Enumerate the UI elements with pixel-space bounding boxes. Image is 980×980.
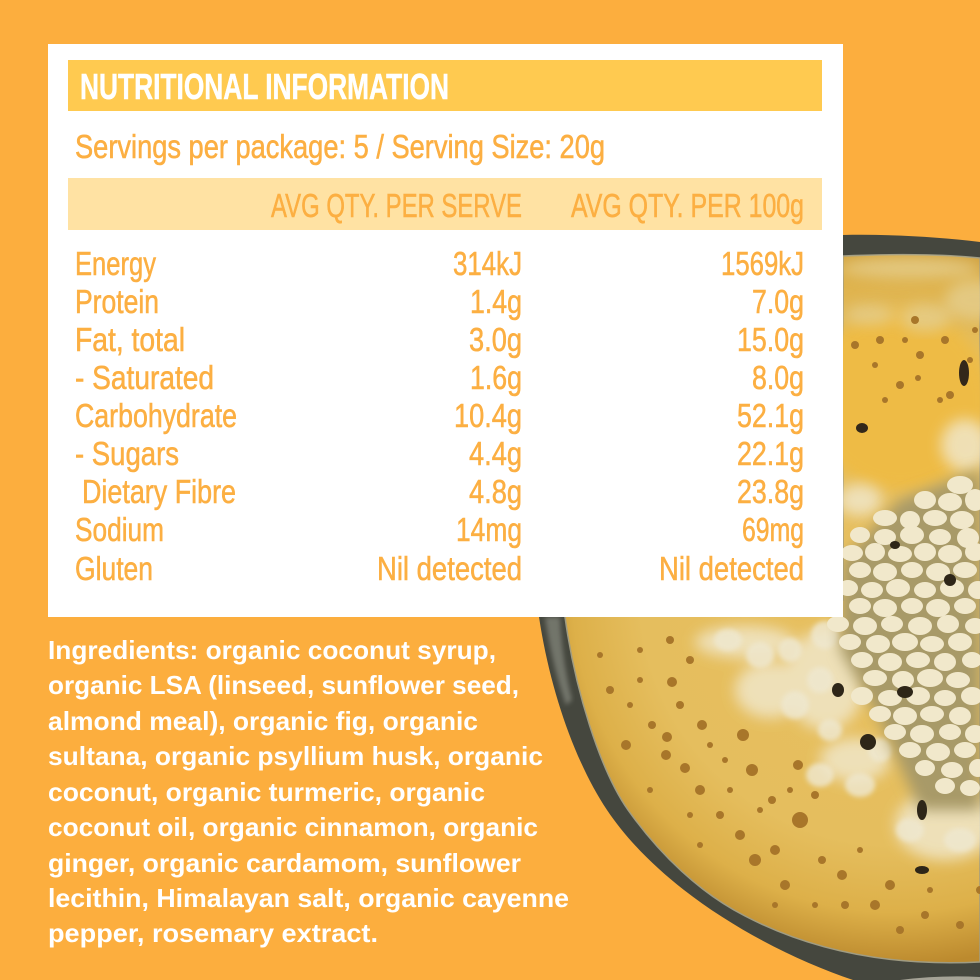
nutrient rows: 8.0g (752, 359, 804, 396)
nutrient rows: Carbohydrate (75, 397, 237, 434)
nutrient rows: 314kJ (453, 245, 522, 282)
nutrient rows: Sodium (75, 511, 164, 548)
nutrient rows: - Sugars (75, 435, 179, 472)
nutrient rows: 52.1g (737, 397, 804, 434)
ingredients text block: lecithin, Himalayan salt, organic cayenne (48, 883, 569, 913)
bubbles (597, 316, 980, 934)
nutrient rows: Fat, total (75, 321, 185, 358)
dark husks top (959, 360, 969, 386)
white card (48, 44, 843, 617)
ingredients text block: organic LSA (linseed, sunflower seed, (48, 670, 519, 700)
nutrient rows: 3.0g (469, 321, 522, 358)
nutrient rows: 15.0g (737, 321, 804, 358)
seed pile base (840, 470, 980, 810)
nutrient rows: 22.1g (737, 435, 804, 472)
rim highlight, left (545, 617, 572, 705)
column header bar: AVG QTY. PER 100g (571, 187, 804, 224)
nutrient rows: 1.4g (470, 283, 522, 320)
nutrient rows: 1569kJ (721, 245, 804, 282)
nutrient rows: Energy (75, 245, 156, 282)
dark husks among seeds (832, 541, 956, 874)
nutrient rows: 23.8g (737, 473, 804, 510)
nutrient rows: Nil detected (659, 550, 804, 587)
nutrient rows: Nil detected (377, 550, 522, 587)
hemp seeds (827, 476, 980, 796)
ingredients text block: sultana, organic psyllium husk, organic (48, 741, 543, 771)
pale top froth (840, 258, 980, 332)
nutrient rows: 10.4g (454, 397, 522, 434)
nutrient rows: 7.0g (752, 283, 804, 320)
photo: golden latte bowl with hemp seeds (539, 235, 980, 980)
nutrient rows: 14mg (456, 511, 522, 548)
column header bar: AVG QTY. PER SERVE (271, 187, 522, 224)
yellow upper latte (843, 312, 980, 494)
ingredients text block: almond meal), organic fig, organic (48, 706, 478, 736)
rim highlight, bottom (900, 976, 980, 980)
nutrient rows: 69mg (742, 511, 804, 548)
blurred out-of-focus seeds (714, 621, 976, 852)
ingredients text block: Ingredients: organic coconut syrup, (48, 635, 496, 665)
panel: nutrition table (48, 44, 843, 617)
ingredients text block: coconut oil, organic cinnamon, organic (48, 812, 538, 842)
nutrient rows: Protein (75, 283, 159, 320)
nutrient rows: Dietary Fibre (82, 473, 236, 510)
nutrient rows: 1.6g (470, 359, 522, 396)
ingredients text block: pepper, rosemary extract. (48, 918, 378, 948)
pale foam patches (695, 419, 980, 860)
foam bubbles and hemp seeds (597, 258, 980, 934)
serving info: Servings per package: 5 / Serving Size: 20g (75, 128, 605, 165)
nutrient rows: 4.4g (469, 435, 522, 472)
nutrient rows: 4.8g (469, 473, 522, 510)
nutrient rows: Gluten (75, 550, 153, 587)
column header bar (68, 178, 822, 230)
latte surface (565, 255, 980, 963)
nutrient rows (75, 245, 804, 587)
nutrient rows: - Saturated (75, 359, 214, 396)
ingredients text block: ginger, organic cardamom, sunflower (48, 848, 521, 878)
title bar (68, 60, 822, 111)
bowl rim (539, 235, 980, 980)
ingredients text block (48, 635, 569, 948)
ingredients text block: coconut, organic turmeric, organic (48, 777, 485, 807)
title bar: NUTRITIONAL INFORMATION (80, 66, 449, 107)
